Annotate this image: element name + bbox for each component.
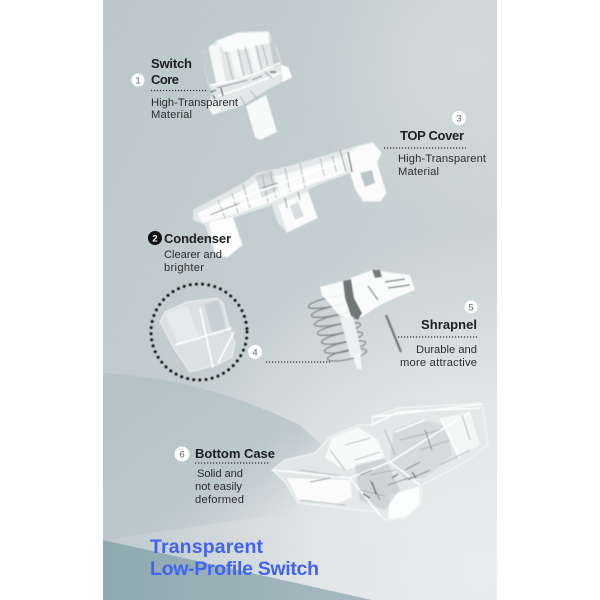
illustration: bottom case — [272, 403, 488, 520]
label: 4 pointer — [248, 345, 330, 362]
label: 3 top cover: Material — [398, 166, 439, 178]
label: 5 shrapnel — [398, 300, 478, 369]
label: 6 bottom case: deformed — [195, 494, 244, 506]
label: 1 switch core: High-Transparent — [151, 97, 239, 109]
illustration: shrapnel and spring — [308, 270, 415, 369]
label: 2 condenser: Clearer and — [164, 249, 222, 261]
label: 1 switch core: Material — [151, 109, 192, 121]
illustration: switch core — [202, 31, 292, 140]
illustration: condenser close-up — [151, 284, 247, 380]
label: 6 bottom case: Solid and — [197, 468, 243, 480]
label: 6 bottom case — [174, 446, 275, 506]
label: 5 shrapnel: 5 — [468, 302, 474, 314]
label: 1 switch core: 1 — [135, 76, 141, 86]
label: 2 condenser: Condenser — [164, 231, 231, 246]
label: 6 bottom case: not easily — [195, 481, 242, 493]
title: Transparent — [150, 536, 264, 558]
label: 1 switch core: Switch — [151, 56, 192, 71]
label: 5 shrapnel: Shrapnel — [421, 317, 477, 332]
label: 3 top cover: TOP Cover — [400, 128, 464, 143]
label: 3 top cover: 3 — [456, 114, 462, 124]
label: 6 bottom case: Bottom Case — [195, 446, 275, 461]
title — [150, 536, 319, 580]
label: 2 condenser — [148, 231, 231, 274]
label: 3 top cover: High-Transparent — [398, 153, 487, 165]
label: 5 shrapnel: Durable and — [416, 344, 477, 356]
label: 4 pointer: 4 — [252, 348, 258, 358]
label: 1 switch core — [132, 56, 239, 121]
label: 2 condenser: brighter — [164, 262, 204, 274]
label: 2 condenser: 2 — [152, 234, 158, 244]
label: 3 top cover — [384, 111, 487, 178]
title: Low-Profile Switch — [150, 558, 319, 580]
label: 1 switch core: Core — [151, 72, 179, 87]
panel: background — [103, 0, 497, 600]
illustration: top cover — [193, 142, 387, 258]
label: 5 shrapnel: more attractive — [400, 357, 477, 369]
label: 6 bottom case: 6 — [179, 450, 185, 460]
